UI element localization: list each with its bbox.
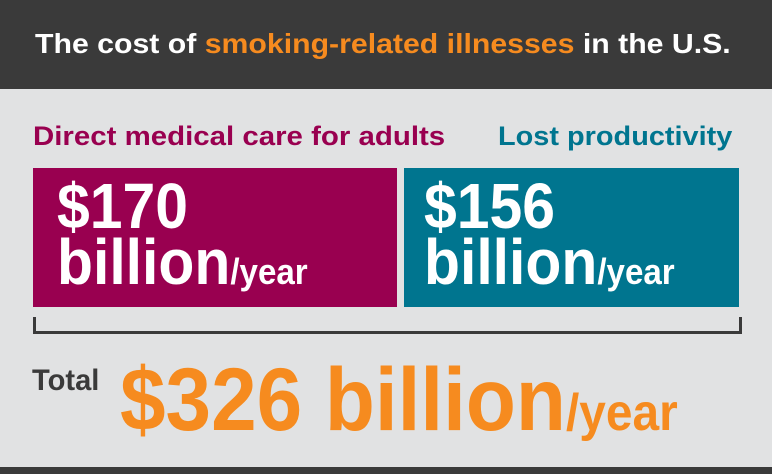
value: $156 billion/year: $156 [424, 170, 555, 242]
value: $170 billion/year [57, 170, 308, 298]
value: $170 billion/year: billion/year [57, 226, 308, 298]
total label: Total [32, 364, 99, 397]
title: The cost of smoking-related illnesses in the U.S. [35, 28, 731, 59]
value: $170 billion/year: $170 [57, 170, 188, 242]
value: $156 billion/year [424, 170, 675, 298]
panel: lost productivity [404, 168, 739, 307]
label: direct medical care: Direct medical care for adults [33, 121, 445, 151]
total value: $326 billion/year [120, 349, 678, 449]
footer bar [0, 467, 772, 474]
panel: direct medical care [33, 168, 397, 307]
bracket [33, 317, 742, 334]
label: lost productivity: Lost productivity [498, 121, 732, 151]
value: $156 billion/year: billion/year [424, 226, 675, 298]
header bar [0, 0, 772, 89]
